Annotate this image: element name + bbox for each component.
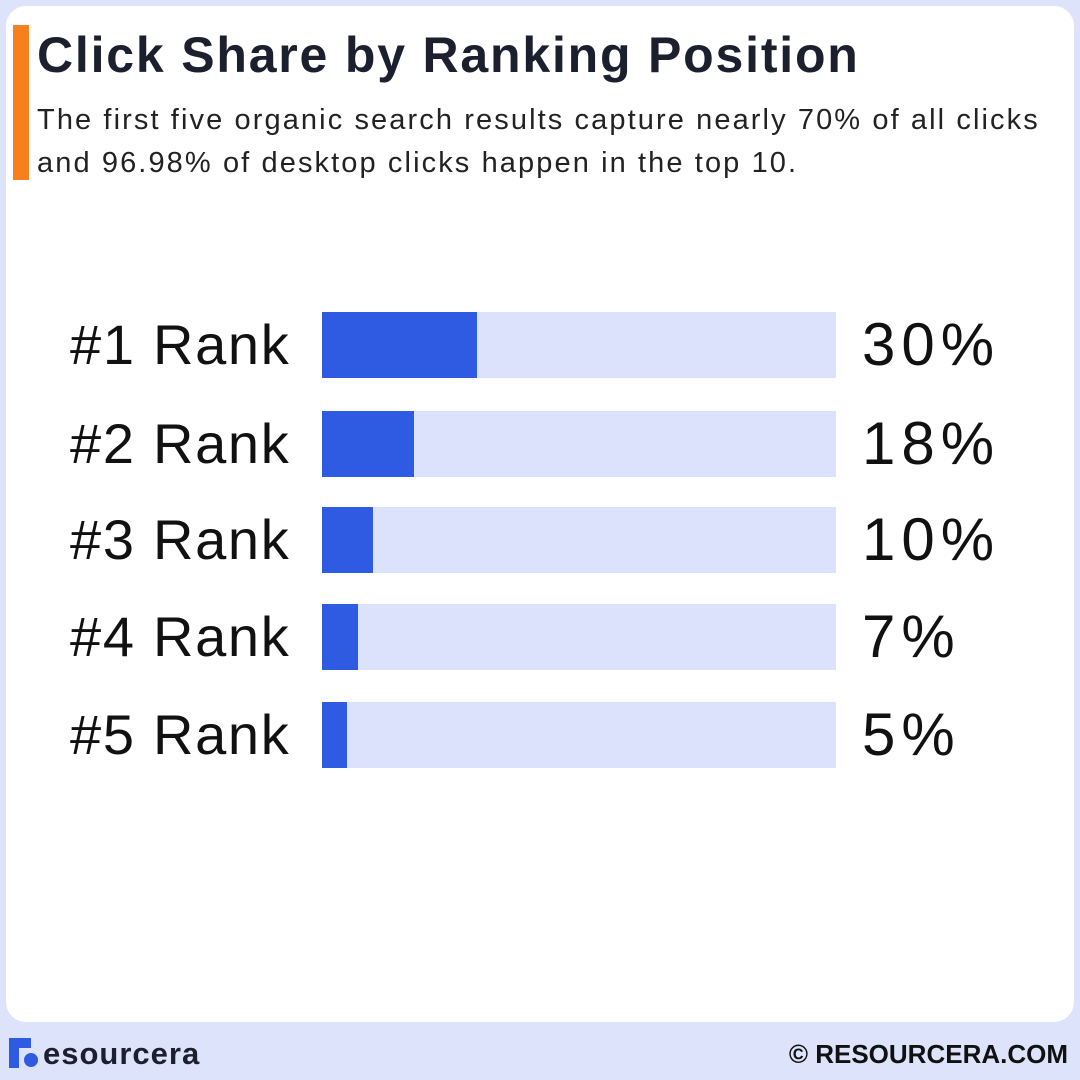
copyright: © RESOURCERA.COM: [789, 1039, 1068, 1069]
row 1: 30%: [862, 311, 1000, 378]
row 4: #4 Rank: [70, 605, 290, 668]
row 2: #2 Rank: [70, 412, 290, 475]
row 5: 5%: [862, 701, 961, 768]
icon: logo mark: [9, 1038, 38, 1068]
row 4: 7%: [862, 603, 961, 670]
row 1: #1 Rank: [70, 313, 290, 376]
row 4: [70, 603, 961, 670]
logo: esourcera: [43, 1036, 200, 1071]
row 5: #5 Rank: [70, 703, 290, 766]
row 5: [70, 701, 961, 768]
subtitle: and 96.98% of desktop clicks happen in the top 10.: [37, 147, 798, 179]
row 3: #3 Rank: [70, 508, 290, 571]
row 3: 10%: [862, 506, 1000, 573]
bar chart: [70, 311, 1000, 768]
row 1: [70, 311, 1000, 378]
subtitle: The first five organic search results capture nearly 70% of all clicks: [37, 104, 1040, 136]
row 2: [70, 410, 1000, 477]
row 2: 18%: [862, 410, 1000, 477]
title: Click Share by Ranking Position: [37, 27, 860, 83]
accent bar: [13, 25, 29, 180]
row 3: [70, 506, 1000, 573]
subtitle: [37, 104, 1040, 179]
